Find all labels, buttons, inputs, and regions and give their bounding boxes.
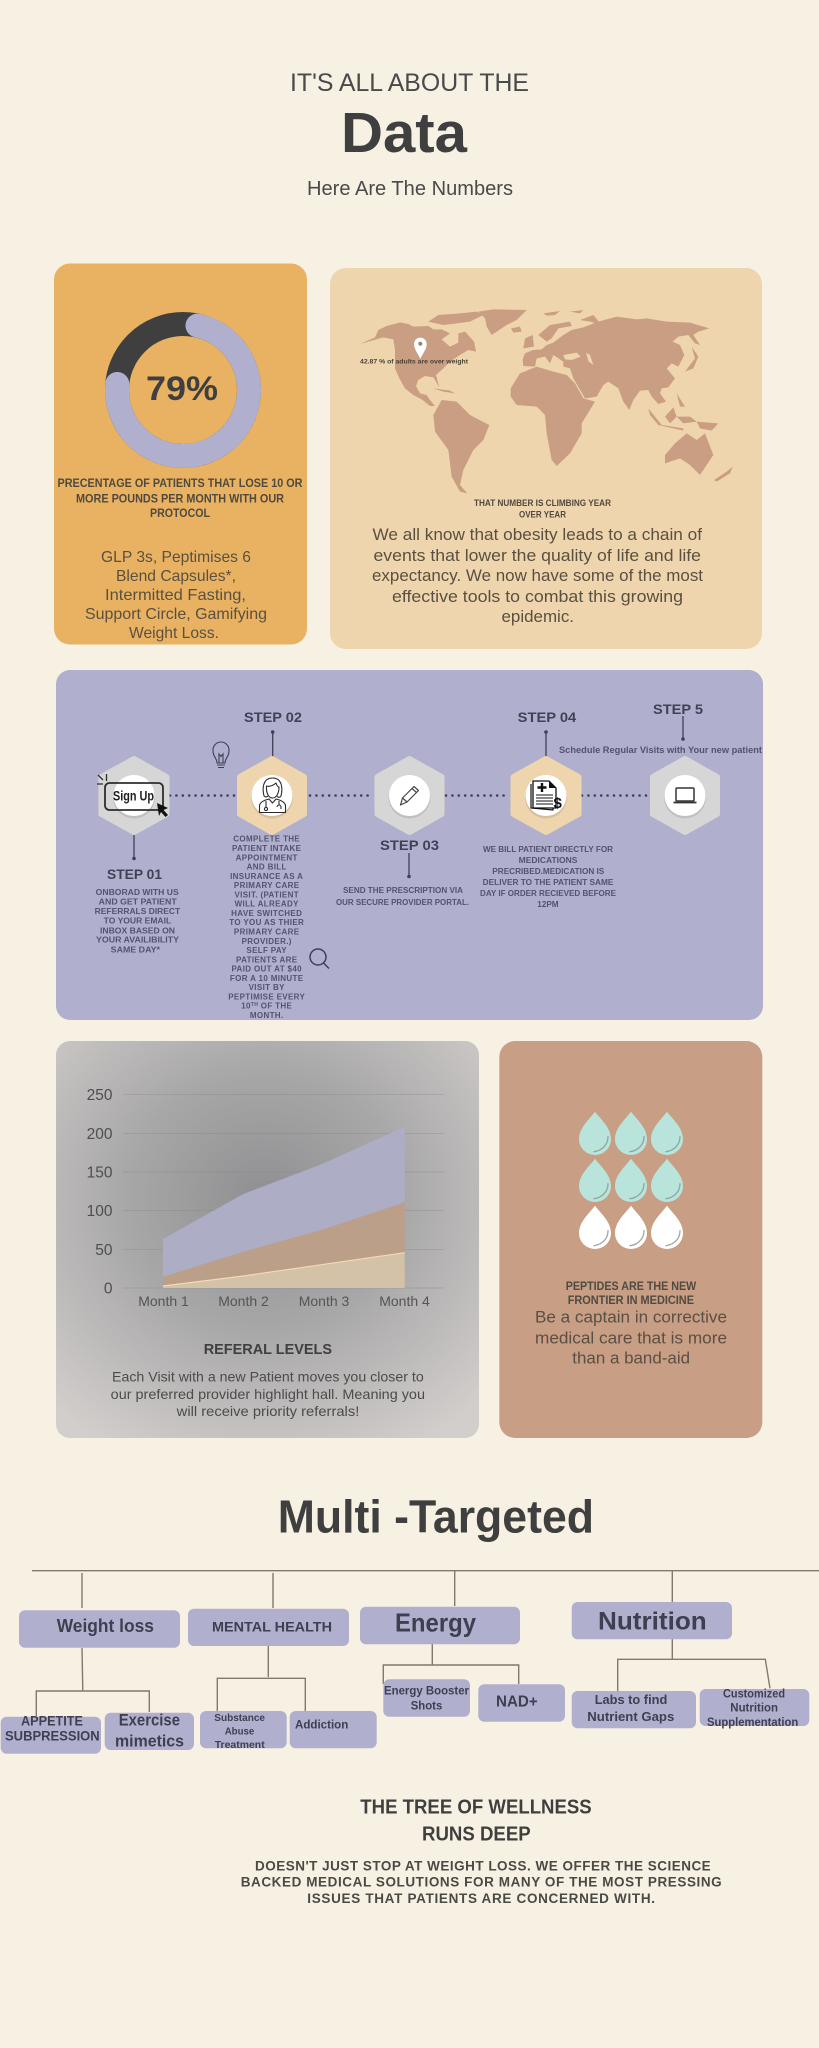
text: protocol ingredients: Intermitted Fasting, bbox=[105, 587, 246, 604]
tree leaf: appetite subpression: APPETITE bbox=[21, 1714, 83, 1729]
heading: data: Data bbox=[341, 101, 468, 165]
text: step 02 description: PRIMARY CARE bbox=[234, 881, 300, 890]
step 04 bbox=[480, 709, 617, 909]
text: step 01 description: INBOX BASED ON bbox=[100, 926, 175, 935]
icon: sign up button: Sign Up bbox=[113, 789, 154, 804]
text: obesity paragraph: expectancy. We now have some of the most bbox=[372, 566, 703, 585]
text: step 02 description: TO YOU AS THIER bbox=[229, 918, 304, 927]
text: captain paragraph: medical care that is more bbox=[535, 1328, 727, 1347]
dotted connector line bbox=[170, 794, 650, 797]
text: step 02 description: VISIT. (PATIENT bbox=[234, 890, 299, 899]
text: step 03 description: OUR SECURE PROVIDER PORTAL. bbox=[336, 898, 469, 907]
text: referral paragraph bbox=[111, 1369, 425, 1419]
text: step 02 description: PRIMARY CARE bbox=[234, 928, 300, 936]
step 05 bbox=[559, 701, 762, 832]
text: step 02 description: SELF PAY bbox=[246, 946, 287, 955]
text: referral paragraph: will receive priority referrals! bbox=[176, 1403, 359, 1419]
text: protocol ingredients: Support Circle, Gamifying bbox=[85, 606, 267, 623]
tree leaf: customized nutrition supplementation bbox=[700, 1688, 809, 1729]
text: step 02 description: COMPLETE THE bbox=[233, 835, 300, 844]
tree leaf: labs to find nutrient gaps bbox=[572, 1691, 696, 1728]
text: protocol ingredients: Weight Loss. bbox=[129, 625, 219, 642]
tree leaf: substance abuse treatment: Abuse bbox=[225, 1725, 254, 1737]
text: captain paragraph: Be a captain in corrective bbox=[535, 1308, 727, 1327]
text: step 01 description: YOUR AVAILIBILITY bbox=[96, 936, 180, 945]
text: protocol ingredients: GLP 3s, Peptimises 6 bbox=[101, 549, 251, 566]
panel: peptides bbox=[499, 1041, 762, 1438]
closing heading: tree of wellness: RUNS DEEP bbox=[422, 1823, 531, 1845]
text: step 01 description: ONBORAD WITH US bbox=[96, 888, 179, 897]
text: step 02 description: APPOINTMENT bbox=[236, 853, 298, 862]
caption: percentage of patients: PRECENTAGE OF PATIENTS THAT LOSE 10 OR bbox=[58, 478, 303, 490]
text: protocol ingredients: Blend Capsules*, bbox=[116, 568, 236, 585]
tree leaf: appetite subpression: SUBPRESSION bbox=[5, 1729, 100, 1744]
text: step 01 description: REFERRALS DIRECT bbox=[95, 907, 180, 916]
closing text: weight loss and beyond: DOESN'T JUST STOP AT WEIGHT LOSS. WE OFFER THE SCIENCE bbox=[255, 1858, 711, 1873]
caption: percentage of patients bbox=[58, 478, 303, 520]
caption: climbing year over year: OVER YEAR bbox=[519, 510, 566, 520]
tree leaf: nad+ bbox=[478, 1684, 565, 1722]
icon: light bulb bbox=[213, 742, 229, 768]
text: referral paragraph: our preferred provider highlight hall. Meaning you bbox=[111, 1386, 425, 1402]
text: obesity paragraph: effective tools to combat this growing bbox=[392, 587, 683, 606]
text: step 02 description: PATIENT INTAKE bbox=[232, 844, 302, 853]
text: obesity paragraph: We all know that obesity leads to a chain of bbox=[372, 525, 702, 544]
closing text: weight loss and beyond bbox=[241, 1858, 722, 1906]
tree leaf: labs to find nutrient gaps: Labs to find bbox=[595, 1692, 667, 1707]
tree leaf: addiction bbox=[290, 1711, 377, 1748]
heading: referal levels: REFERAL LEVELS bbox=[204, 1341, 332, 1358]
tree node: nutrition: Nutrition bbox=[598, 1607, 707, 1635]
tree leaf: addiction: Addiction bbox=[295, 1717, 348, 1731]
text: step 04 description: DAY IF ORDER RECIEVED BEFORE bbox=[480, 889, 617, 898]
icon: sign up button bbox=[97, 774, 168, 817]
step 03 bbox=[336, 759, 469, 907]
caption: percentage of patients: PROTOCOL bbox=[150, 508, 210, 520]
icon: medical bill bbox=[531, 781, 562, 812]
tree node: mental health: MENTAL HEALTH bbox=[212, 1619, 332, 1635]
text: step 02 description: AND BILL bbox=[247, 862, 287, 872]
area chart: Month 4 bbox=[379, 1293, 430, 1309]
tree node: mental health bbox=[188, 1609, 349, 1646]
text: step 02 description: FOR A 10 MINUTE bbox=[230, 974, 304, 983]
text: captain paragraph: than a band-aid bbox=[572, 1348, 690, 1367]
tree node: weight loss bbox=[19, 1610, 180, 1648]
header: title block bbox=[290, 69, 529, 200]
world map bbox=[360, 309, 733, 493]
tree leaf: appetite subpression bbox=[1, 1714, 101, 1754]
area chart: Month 1 bbox=[138, 1293, 189, 1309]
text: step 02 description: VISIT BY bbox=[249, 983, 285, 992]
step 01 bbox=[95, 759, 180, 954]
text: protocol ingredients bbox=[85, 549, 267, 642]
tree leaf: labs to find nutrient gaps: Nutrient Gaps bbox=[587, 1709, 674, 1724]
text: step 04 description: WE BILL PATIENT DIRECTLY FOR bbox=[483, 845, 613, 854]
text: step 02 description: 10 bbox=[241, 1002, 251, 1011]
step 02: STEP 02 bbox=[244, 709, 302, 725]
icon: drop grid bbox=[579, 1112, 683, 1249]
text: step 02 description: PROVIDER.) bbox=[242, 937, 292, 946]
closing text: weight loss and beyond: ISSUES THAT PATIENTS ARE CONCERNED WITH. bbox=[307, 1891, 655, 1906]
step 05: Schedule Regular Visits with Your new patient bbox=[559, 745, 762, 755]
text: step 04 description: DELIVER TO THE PATIENT SAME bbox=[483, 878, 614, 887]
text: captain paragraph bbox=[535, 1308, 727, 1367]
heading: it's all about the: IT'S ALL ABOUT THE bbox=[290, 69, 529, 97]
tree node: energy: Energy bbox=[395, 1608, 476, 1638]
text: obesity paragraph: epidemic. bbox=[502, 607, 574, 626]
icon: magnifying glass bbox=[310, 949, 329, 968]
text: step 02 description: HAVE SWITCHED bbox=[231, 909, 302, 918]
icon: laptop bbox=[674, 788, 696, 802]
text: step 04 description: 12PM bbox=[537, 900, 559, 909]
text: step 01 description: TO YOUR EMAIL bbox=[104, 916, 171, 925]
text: step 02 description: MONTH. bbox=[250, 1011, 284, 1020]
tree node: weight loss: Weight loss bbox=[57, 1615, 154, 1636]
subheading: here are the numbers: Here Are The Numbers bbox=[307, 178, 513, 200]
area chart: 200 bbox=[87, 1126, 113, 1143]
donut chart: 79%: 79% bbox=[146, 370, 218, 408]
text: step 02 description: OF THE bbox=[258, 1002, 293, 1011]
text: step 04 description bbox=[480, 845, 617, 909]
heading: peptides are the new frontier bbox=[566, 1281, 696, 1307]
tree node: energy bbox=[360, 1607, 520, 1644]
step 05: STEP 5 bbox=[653, 701, 703, 717]
panel: world map and obesity text bbox=[330, 268, 762, 649]
heading: peptides are the new frontier: PEPTIDES ARE THE NEW bbox=[566, 1281, 696, 1293]
step 03: STEP 03 bbox=[380, 837, 439, 853]
text: step 01 description: AND GET PATIENT bbox=[99, 897, 177, 906]
tree leaf: exercise mimetics: mimetics bbox=[115, 1733, 184, 1751]
icon: map pin bbox=[414, 338, 427, 359]
text: obesity paragraph bbox=[372, 525, 703, 626]
tree leaf: exercise mimetics bbox=[105, 1712, 194, 1751]
text: step 04 description: PRECRIBED.MEDICATION IS bbox=[492, 867, 605, 876]
tree leaf: customized nutrition supplementation: Customized bbox=[723, 1688, 785, 1700]
text: step 03 description bbox=[336, 886, 469, 907]
text: referral paragraph: Each Visit with a new Patient moves you closer to bbox=[112, 1369, 424, 1385]
tree leaf: nad+: NAD+ bbox=[496, 1694, 538, 1711]
text: step 02 description: PEPTIMISE EVERY bbox=[228, 992, 305, 1002]
text: obesity paragraph: events that lower the quality of life and life bbox=[374, 546, 701, 565]
donut chart: 79% bbox=[117, 324, 249, 456]
tree leaf: substance abuse treatment bbox=[200, 1711, 287, 1751]
text: step 01 description bbox=[95, 888, 180, 954]
text: step 02 description bbox=[228, 835, 305, 1020]
panel: 79 percent donut bbox=[54, 264, 307, 644]
text: step 02 description: WILL ALREADY bbox=[235, 900, 299, 909]
area chart: 150 bbox=[87, 1165, 113, 1182]
area chart bbox=[87, 1087, 444, 1309]
tree leaf: energy booster shots: Energy Booster bbox=[384, 1683, 469, 1697]
text: step 04 description: MEDICATIONS bbox=[519, 856, 578, 865]
heading: peptides are the new frontier: FRONTIER IN MEDICINE bbox=[568, 1295, 694, 1307]
step 04: STEP 04 bbox=[518, 709, 576, 725]
tree leaf: energy booster shots bbox=[383, 1679, 470, 1717]
caption: percentage of patients: MORE POUNDS PER MONTH WITH OUR bbox=[76, 494, 285, 506]
area chart: 250 bbox=[87, 1087, 113, 1104]
area chart: 50 bbox=[95, 1242, 113, 1259]
closing heading: tree of wellness bbox=[360, 1796, 592, 1845]
heading: multi-targeted: Multi -Targeted bbox=[278, 1490, 594, 1542]
text: step 02 description: PATIENTS ARE bbox=[236, 955, 298, 964]
map label: adults overweight: 42.87 % of adults are over weight bbox=[360, 359, 469, 366]
tree leaf: exercise mimetics: Exercise bbox=[119, 1712, 180, 1730]
closing heading: tree of wellness: THE TREE OF WELLNESS bbox=[360, 1796, 592, 1818]
tree node: nutrition bbox=[572, 1602, 732, 1639]
closing text: weight loss and beyond: BACKED MEDICAL SOLUTIONS FOR MANY OF THE MOST PRESSING bbox=[241, 1875, 722, 1890]
text: step 02 description: INSURANCE AS A bbox=[230, 872, 303, 881]
icon: medical bill: $ bbox=[554, 795, 562, 812]
text: step 01 description: SAME DAY* bbox=[111, 945, 161, 954]
text: step 02 description: TH bbox=[251, 1002, 258, 1008]
tree leaf: energy booster shots: Shots bbox=[411, 1698, 443, 1712]
area chart: 0 bbox=[104, 1281, 113, 1298]
text: step 02 description: PAID OUT AT $40 bbox=[231, 965, 302, 974]
step 02 bbox=[240, 709, 304, 832]
tree leaf: substance abuse treatment: Substance bbox=[214, 1712, 265, 1724]
panel: referral levels chart bbox=[56, 1041, 479, 1438]
area chart: Month 3 bbox=[299, 1293, 350, 1309]
text: step 03 description: SEND THE PRESCRIPTION VIA bbox=[343, 886, 463, 895]
tree connectors bbox=[32, 1571, 819, 1716]
icon: doctor bbox=[260, 778, 286, 812]
tree leaf: customized nutrition supplementation: Supplementation bbox=[707, 1717, 798, 1729]
tree leaf: substance abuse treatment: Treatment bbox=[215, 1739, 265, 1751]
tree leaf: customized nutrition supplementation: Nutrition bbox=[730, 1703, 778, 1715]
panel: five step process bbox=[56, 670, 763, 1020]
caption: climbing year over year: THAT NUMBER IS CLIMBING YEAR bbox=[474, 498, 611, 509]
icon: pencil bbox=[400, 786, 418, 805]
caption: climbing year over year bbox=[474, 498, 611, 520]
area chart: 100 bbox=[87, 1203, 113, 1220]
area chart: Month 2 bbox=[218, 1293, 269, 1309]
step 01: STEP 01 bbox=[107, 866, 162, 882]
